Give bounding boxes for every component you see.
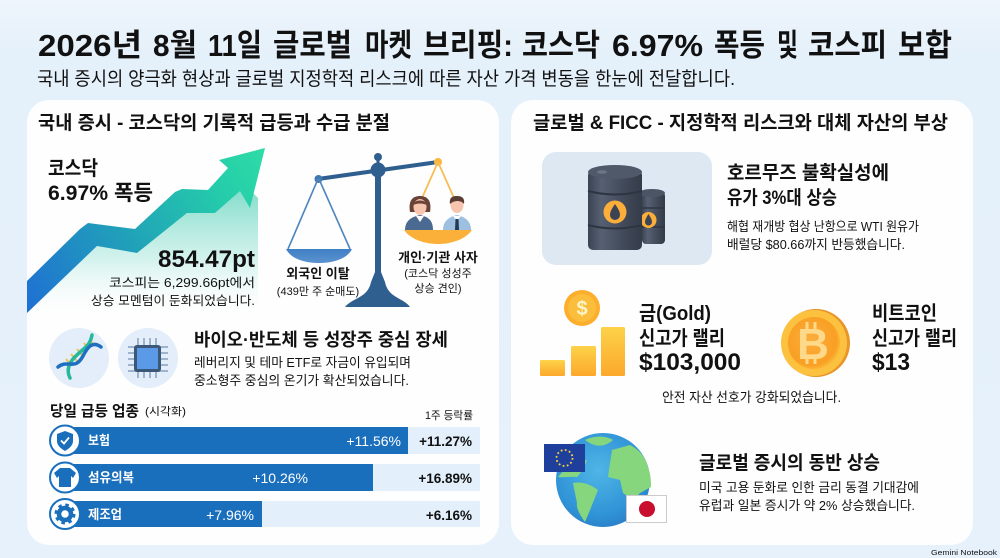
growth stocks body: 중소형주 중심의 온기가 확산되었습니다. [194,373,409,388]
title: 글로벌 [273,28,352,63]
title: 보합 [898,28,952,63]
title: 코스피 [808,28,887,63]
growth stocks body: 레버리지 및 테마 ETF로 자금이 유입되며 [194,355,411,370]
title [38,28,952,63]
bar row: insurance: +11.27% [419,434,472,449]
bitcoin text [872,302,957,376]
icon: globe with flags [544,433,666,527]
gold text [639,303,741,376]
title: 2026년 [38,28,142,63]
title: 브리핑: [423,28,513,63]
icon: gold coin and bars [540,290,625,376]
panel heading: domestic: 국내 증시 - 코스닥의 기록적 급등과 수급 분절 [38,112,390,134]
oil heading [727,162,889,209]
sector chart heading: (시각화) [145,405,186,418]
scale label: foreign outflow: 외국인 이탈 [286,266,350,281]
oil body: 해협 재개방 협상 난항으로 WTI 원유가 [727,219,919,234]
gold text: 신고가 랠리 [639,327,725,350]
panel: global and FICC [511,100,973,545]
icon: gold coin and bars: $ [576,298,588,320]
panel: domestic market [27,100,499,545]
KOSDAQ headline: 6.97% 폭등 [48,182,153,205]
title: 및 [777,28,798,63]
global equities heading: 글로벌 증시의 동반 상승 [699,452,880,474]
weekly change column label: 1주 등락률 [425,409,473,422]
icon: oil barrels [542,152,712,265]
KOSPI note: 상승 모멘텀이 둔화되었습니다. [91,294,255,308]
growth stocks body [194,355,411,388]
bar row: manufacturing: 제조업 [88,507,122,522]
oil heading: 유가 3%대 상승 [727,187,837,209]
title: 코스닥 [522,28,600,63]
icon: bitcoin coin [781,309,850,377]
chart: rising KOSDAQ arrow [27,148,265,322]
title: 폭등 [714,28,765,63]
bar row: textiles: 섬유의복 [88,470,134,485]
global equities body [699,480,919,513]
bar row: manufacturing: +7.96% [206,507,254,523]
scale label: retail and institutions: 상승 견인) [414,282,462,295]
sector chart heading: 당일 급등 업종 [50,403,139,420]
oil heading: 호르무즈 불확실성에 [727,162,889,184]
bar row: insurance: 보험 [88,433,110,448]
scale label: foreign outflow: (439만 주 순매도) [277,285,359,298]
title: 6.97% [612,28,703,63]
icon: woman investor [405,196,433,230]
scale label: retail and institutions [398,250,478,295]
KOSDAQ headline: 코스닥 [48,157,98,180]
bitcoin text: 비트코인 [872,302,937,325]
balance scale [286,153,472,307]
bar row: textiles: +16.89% [418,471,472,486]
KOSDAQ headline [48,157,153,205]
bar row: insurance [50,426,480,456]
bar row: insurance: +11.56% [346,433,401,449]
bar row: textiles: +10.26% [252,470,308,486]
icon: semiconductor chip [118,328,178,388]
scale label: retail and institutions: 개인·기관 사자 [398,250,478,265]
bitcoin text: 신고가 랠리 [872,327,957,350]
KOSDAQ value: 854.47pt [158,246,255,273]
gold text: $103,000 [639,349,741,376]
safe asset note: 안전 자산 선호가 강화되었습니다. [662,390,841,405]
global equities body: 미국 고용 둔화로 인한 금리 동결 기대감에 [699,480,919,495]
growth stocks heading: 바이오·반도체 등 성장주 중심 장세 [194,330,448,350]
bar row: manufacturing [50,499,480,529]
oil body [727,219,919,252]
flag: Japan [626,496,666,522]
bar row: textiles [50,462,480,492]
icon: bitcoin coin: B [797,320,829,369]
oil body: 배럴당 $80.66까지 반등했습니다. [727,237,905,252]
scale label: retail and institutions: (코스닥 성성주 [404,267,472,280]
subtitle: 국내 증시의 양극화 현상과 글로벌 지정학적 리스크에 따른 자산 가격 변동을 한눈에 전달합니다. [37,68,735,90]
panel heading: global: 글로벌 & FICC - 지정학적 리스크와 대체 자산의 부상 [533,112,948,134]
sector chart heading [50,403,186,420]
bar row: manufacturing: +6.16% [426,508,472,523]
title: 마켓 [365,28,412,63]
KOSPI note [91,276,255,308]
bitcoin text: $13 [872,349,910,376]
title: 11일 [208,28,262,63]
flag: European Union [544,444,585,472]
scale label: foreign outflow [277,266,359,298]
KOSPI note: 코스피는 6,299.66pt에서 [109,276,255,290]
icon: man investor [443,196,471,230]
title: 8월 [153,28,197,63]
icon: DNA [49,328,109,388]
watermark: Gemini Notebook [931,550,998,557]
gold text: 금(Gold) [639,303,711,325]
global equities body: 유럽과 일본 증시가 약 2% 상승했습니다. [699,498,915,513]
